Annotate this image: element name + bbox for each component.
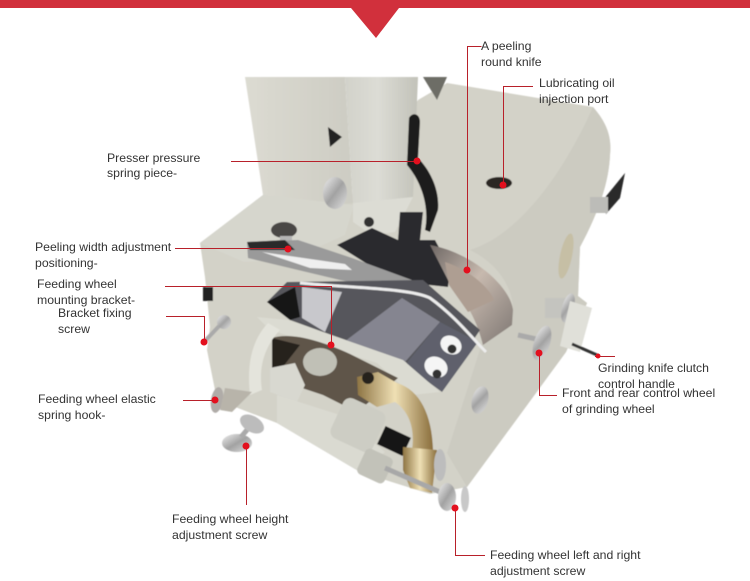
top banner: [0, 0, 750, 38]
machine photo: [200, 77, 625, 512]
dark notch: [328, 127, 342, 147]
label: a peeling round knife: A peeling: [481, 39, 531, 53]
column foot block: [353, 197, 413, 235]
front bar: [257, 317, 440, 395]
label: presser pressure spring piece: Presser pressure: [107, 151, 200, 165]
main housing: [200, 83, 610, 494]
label: feeding wheel height adjustment screw: Feeding wheel height: [172, 512, 288, 526]
label: lubricating oil injection port: injection port: [539, 92, 609, 106]
label: a peeling round knife: round knife: [481, 55, 542, 69]
label: presser pressure spring piece: spring piece-: [107, 166, 177, 180]
right side knob: [469, 384, 491, 416]
knob front adjust: [385, 468, 440, 492]
label: grinding knife clutch control handle: control handle: [598, 377, 675, 391]
grinding handle: [572, 344, 597, 355]
label: front and rear control wheel: Front and rear control wheel: [562, 386, 715, 400]
brass hook: [357, 372, 433, 450]
label: grinding knife clutch control handle: Grinding knife clutch: [598, 361, 709, 375]
label: peeling width adjustment: Peeling width adjustment: [35, 240, 171, 254]
red marker dots: [200, 158, 600, 512]
label: feeding wheel mounting bracket: mounting bracket-: [37, 293, 135, 307]
presser spring: [407, 114, 438, 232]
knob fixing screw: [204, 323, 222, 342]
label: feeding wheel height adjustment screw: adjustment screw: [172, 528, 267, 542]
label: peeling width adjustment: positioning-: [35, 256, 98, 270]
black tab left: [203, 287, 213, 301]
leader lines: [165, 46, 615, 556]
label: bracket fixing screw: Bracket fixing: [58, 306, 132, 320]
side adjust knob: [323, 177, 347, 209]
presser foot block: [337, 212, 450, 287]
knob elastic spring hook: [209, 386, 225, 414]
top knob: [271, 222, 297, 238]
knob height: [222, 434, 252, 452]
lower white carriage: [277, 395, 385, 472]
label plate: [555, 232, 577, 280]
label: lubricating oil injection port: Lubricating oil: [539, 76, 615, 90]
base plate: [200, 195, 354, 262]
chrome screw holes: [437, 332, 465, 358]
label: bracket fixing screw: screw: [58, 322, 90, 336]
front rear wheel: [518, 335, 536, 339]
lower cavity: [272, 336, 398, 412]
chrome knife guard: [430, 245, 513, 345]
label: feeding wheel left and right adjustment screw: Feeding wheel left and right: [490, 548, 640, 562]
label: feeding wheel elastic spring hook: Feeding wheel elastic: [38, 392, 156, 406]
label: feeding wheel elastic spring hook: spring hook-: [38, 408, 105, 422]
feed wheel arch: [249, 323, 280, 395]
oil port: [486, 177, 512, 189]
housing shaded side: [447, 107, 610, 487]
label: feeding wheel left and right adjustment screw: adjustment screw: [490, 564, 585, 578]
right knob assembly: [545, 298, 567, 318]
pressing arm: [245, 77, 353, 213]
right handle: [603, 173, 625, 214]
peeling guide arm: [247, 240, 412, 292]
black coil spring: [377, 426, 411, 456]
chrome folder plates: [267, 280, 480, 390]
vertical column: [345, 77, 418, 207]
label: front and rear control wheel: of grinding wheel: [562, 402, 655, 416]
label: feeding wheel mounting bracket: Feeding wheel: [37, 277, 117, 291]
